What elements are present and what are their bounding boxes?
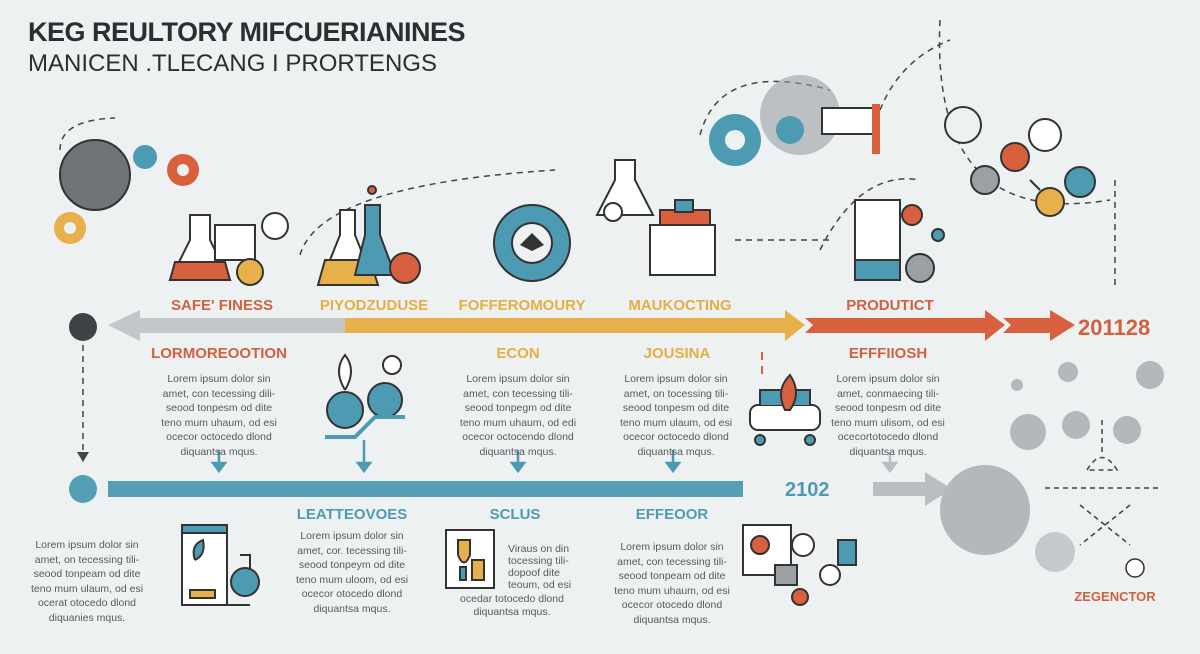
text: Lorem ipsum dolor sin	[624, 373, 728, 385]
year 201128: 201128	[1078, 315, 1150, 340]
text: ECON	[496, 345, 540, 362]
icon: globes with plant	[325, 355, 405, 437]
text blocks: ocecor octocedo dlond	[166, 431, 272, 443]
text blocks	[161, 373, 277, 458]
second row texts	[31, 539, 143, 624]
second row texts: teno mum ulaum, od esi	[31, 582, 143, 594]
text: ocecor octocedo dlond	[623, 431, 729, 443]
icon: top gears cluster	[709, 75, 880, 166]
text: ocecor otocedo dlond	[302, 588, 402, 600]
icon: gray gears right	[940, 361, 1164, 572]
text: FOFFEROMOURY	[459, 297, 585, 314]
text: diquantsa mqus.	[479, 446, 557, 458]
second row texts: amet, on tecessing tili-	[35, 554, 139, 566]
text: diquantsa mqus.	[313, 602, 391, 614]
icon: cart with flame	[750, 375, 820, 445]
icon: diagram arrows	[1045, 420, 1160, 545]
text blocks: teno mum uhaum, od esi	[161, 416, 277, 428]
subtitle: MANICEN .TLECANG I PRORTENGS	[28, 50, 437, 77]
icon: teal gear	[494, 205, 570, 281]
text: diquantsa mqus.	[849, 446, 927, 458]
red arrows	[805, 310, 1075, 341]
text: teno mum ulaum, od esi	[620, 416, 732, 428]
second row texts: seood tonpeam od dite	[34, 568, 140, 580]
text: Lorem ipsum dolor sin	[836, 373, 940, 385]
text blocks: seood tonpesm od dite	[166, 402, 272, 414]
second row texts: ocerat otocedo dlond	[38, 597, 136, 609]
text: seood tonpeym od dite	[299, 559, 405, 571]
second row texts: Lorem ipsum dolor sin	[35, 539, 139, 551]
small arrows	[213, 440, 679, 471]
text: SCLUS	[490, 506, 540, 523]
teal circle	[69, 475, 97, 503]
text: diquantsa mqus.	[633, 614, 711, 626]
text: teno mum uloom, od esi	[296, 574, 408, 586]
text: Lorem ipsum dolor sin	[466, 373, 570, 385]
year 2102: 2102	[785, 479, 830, 501]
text: ocedar totocedo dlond	[460, 593, 564, 605]
text: ocecor octocendo dlond	[462, 431, 574, 443]
text: amet, con tecessing tili-	[617, 556, 727, 568]
text: seood tonpegm od dite	[465, 402, 571, 414]
text: amet, con tecessing tili-	[463, 388, 573, 400]
text: PRODUTICT	[846, 297, 934, 314]
icon: beakers	[318, 186, 420, 285]
dark circle	[69, 313, 97, 341]
text: EFFFIIOSH	[849, 345, 927, 362]
text: Lorem ipsum dolor sin	[300, 530, 404, 542]
text: seood tonpeam od dite	[619, 570, 725, 582]
text: MAUKOCTING	[628, 297, 732, 314]
text: seood tonpesm od dite	[835, 402, 941, 414]
text: PIYODZUDUSE	[320, 297, 428, 314]
text: diquantsa mqus.	[637, 446, 715, 458]
text: amet, conmaecing tili-	[837, 388, 939, 400]
dashed connectors	[60, 20, 1115, 462]
text: teno mum ulisom, od esi	[831, 416, 945, 428]
orange bar	[345, 310, 805, 341]
text: teoum, od esi	[508, 579, 571, 591]
icon: chart box	[446, 530, 494, 588]
text: tocessing tili-	[508, 555, 569, 567]
text blocks: diquantsa mqus.	[180, 446, 258, 458]
text: ocecortotocedo dlond	[838, 431, 938, 443]
icon: notebook with flask	[182, 525, 259, 605]
text: amet, cor. tecessing tili-	[297, 544, 407, 556]
gray back arrow	[108, 310, 345, 341]
icon: product jar	[855, 200, 944, 282]
text: amet, on tocessing tili-	[624, 388, 728, 400]
text: EFFEOOR	[636, 506, 708, 523]
text: ocecor otocedo dlond	[622, 599, 722, 611]
text blocks: Lorem ipsum dolor sin	[167, 373, 271, 385]
text: ZEGENCTOR	[1074, 589, 1156, 604]
text: teno mum uhaum, od edi	[460, 416, 576, 428]
text: teno mum uhaum, od esi	[614, 584, 730, 596]
text: Lorem ipsum dolor sin	[620, 541, 724, 553]
gray right arrow	[873, 472, 952, 506]
labels below bar: LORMOREOOTION	[151, 345, 287, 362]
text: diquantsa mqus.	[473, 606, 551, 618]
icon: circles network	[945, 107, 1095, 216]
icon: machine with flask	[597, 160, 715, 275]
text: dopoof dite	[508, 567, 560, 579]
second row labels: LEATTEOVOES	[297, 506, 407, 523]
icon: gears and devices	[743, 525, 856, 605]
text blocks: amet, con tecessing dili-	[163, 388, 275, 400]
labels top: SAFE' FINESS	[171, 297, 273, 314]
icon: top-left globe and gears	[54, 140, 199, 244]
teal bar	[108, 481, 743, 497]
text: Viraus on din	[508, 543, 569, 555]
text: seood tonpesm od dite	[623, 402, 729, 414]
second row texts: diquanies mqus.	[49, 612, 125, 624]
title: KEG REULTORY MIFCUERIANINES	[28, 17, 465, 47]
icon: flask lab	[170, 213, 288, 285]
text: JOUSINA	[644, 345, 710, 362]
